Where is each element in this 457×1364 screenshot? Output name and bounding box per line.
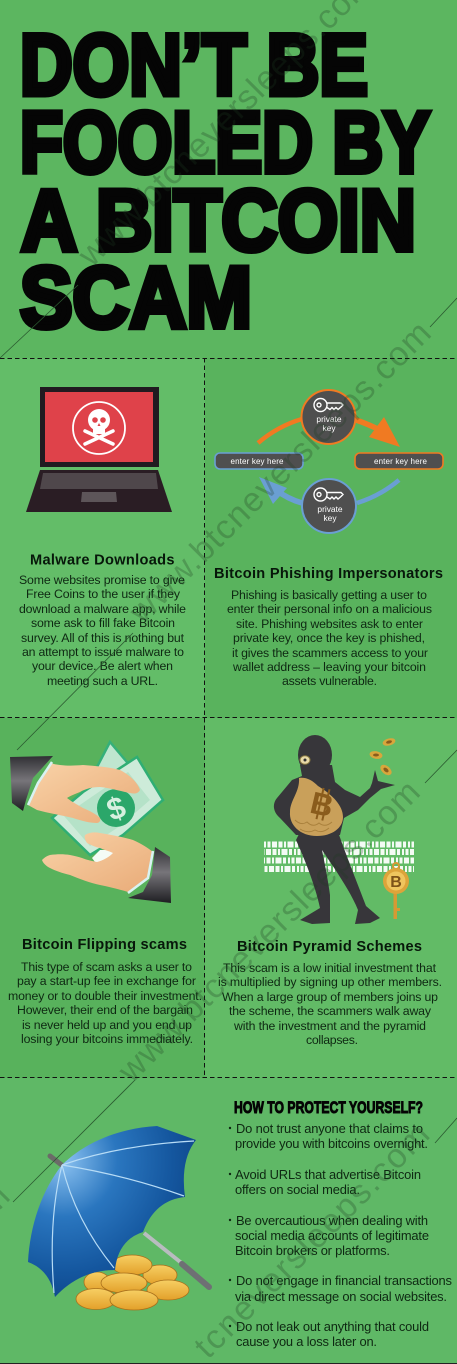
heading: malware downloads: Malware Downloads [30, 552, 174, 568]
text: malware description [19, 573, 186, 688]
icon: hands exchanging money: $ [102, 789, 130, 828]
text: phishing description: Phishing is basically getting a user to [231, 588, 427, 602]
diagram: private key exchange: enter key here [230, 457, 284, 466]
panel: malware downloads [0, 358, 205, 718]
title: A BITCOIN [21, 173, 416, 269]
list: protection tips: Do not engage in financial transactions [236, 1273, 452, 1288]
list: protection tips: provide you with bitcoins overnight. [235, 1136, 428, 1151]
text: pyramid description: the scheme, the scammers walk away [229, 1004, 432, 1018]
text: pyramid description: with the investment and the pyramid [233, 1019, 426, 1033]
list: protection tips: Bitcoin brokers or platforms. [235, 1243, 390, 1258]
watermarks: www.btcneversleeps.com: www.btcneversleeps.com [110, 773, 428, 1090]
list: protection tips: cause you a loss later on. [236, 1334, 377, 1349]
icon: masked thief with bitcoin bag and key [264, 735, 414, 924]
text: flipping description: However, their end of the bargain [17, 1003, 193, 1017]
text: malware description: some ask to fill fake Bitcoin [31, 616, 175, 630]
text: flipping description: money or to double their investment. [8, 989, 202, 1003]
text: phishing description: site. Phishing websites ask to enter [236, 617, 423, 631]
diagram: private key exchange: key [323, 513, 337, 523]
text: pyramid description [218, 961, 442, 1047]
text: phishing description [227, 588, 432, 688]
heading: bitcoin pyramid schemes: Bitcoin Pyramid Schemes [237, 939, 422, 955]
text: flipping description: losing your bitcoins immediately. [21, 1032, 193, 1046]
text: flipping description: This type of scam asks a user to [21, 960, 192, 974]
text: flipping description [8, 960, 202, 1046]
text: phishing description: wallet address – leaving your bitcoin [232, 660, 426, 674]
panel: bitcoin flipping scams [0, 718, 205, 1078]
panel: bitcoin pyramid schemes [205, 718, 457, 1078]
list: protection tips: Avoid URLs that advertise Bitcoin [235, 1167, 421, 1182]
watermarks: www.btcneversleeps.com: tcneversleeps.com [187, 1115, 437, 1364]
text: flipping description: is never held up and you end up [22, 1018, 192, 1032]
text: pyramid description: This scam is a low initial investment that [223, 961, 437, 975]
watermarks: www.btcneversleeps.com: www.btcneversleeps.com [121, 314, 439, 631]
text: malware description: Some websites promise to give [19, 573, 185, 587]
diagram: private key exchange: private [317, 504, 343, 514]
diagram: private key exchange [215, 390, 443, 533]
text: pyramid description: collapses. [306, 1033, 358, 1047]
diagram: private key exchange: key [322, 423, 336, 433]
text: malware description: survey. All of this is nothing but [21, 631, 185, 645]
text: pyramid description: When a large group of members joins up [222, 990, 438, 1004]
text: malware description: your device. Be alert when [32, 659, 173, 673]
icon: masked thief with bitcoin bag and key: B [307, 785, 337, 824]
text: phishing description: it gives the scammers access to your [232, 646, 428, 660]
diagram: private key exchange: private [316, 414, 342, 424]
heading: bitcoin flipping scams: Bitcoin Flipping scams [22, 937, 187, 953]
icon: hands exchanging money [10, 742, 171, 903]
text: phishing description: assets vulnerable. [282, 674, 377, 688]
list: protection tips: social media accounts of legitimate [235, 1228, 429, 1243]
text: malware description: download a malware app, while [19, 602, 186, 616]
diagram: private key exchange: enter key here [374, 457, 428, 466]
text: pyramid description: is multiplied by signing up other members. [218, 975, 442, 989]
title: DON’T BE [20, 18, 368, 114]
text: malware description: meeting such a URL. [47, 674, 158, 688]
icon: laptop with skull [26, 387, 172, 512]
list: protection tips [229, 1121, 452, 1349]
text: phishing description: private key, once the key is phished, [233, 631, 425, 645]
text: malware description: an attempt to issue malware to [22, 645, 184, 659]
icon: umbrella over gold coins [28, 1126, 209, 1310]
text: phishing description: enter their personal info on a malicious [227, 602, 432, 616]
list: protection tips: via direct message on social websites. [235, 1289, 447, 1304]
title: SCAM [20, 250, 252, 346]
panel: bitcoin phishing impersonators [205, 358, 457, 718]
text: malware description: Free Coins to the user if they [26, 587, 181, 601]
panel: how to protect yourself [0, 1078, 457, 1363]
list: protection tips: offers on social media. [235, 1182, 360, 1197]
list: protection tips: Do not leak out anything that could [236, 1319, 429, 1334]
list: protection tips: Be overcautious when dealing with [236, 1213, 428, 1228]
icon: masked thief with bitcoin bag and key: B [390, 874, 402, 891]
heading: bitcoin phishing impersonators: Bitcoin Phishing Impersonators [214, 566, 443, 582]
title [20, 18, 430, 346]
text: flipping description: pay a start-up fee in exchange for [17, 974, 196, 988]
list: protection tips: Do not trust anyone that claims to [236, 1121, 423, 1136]
